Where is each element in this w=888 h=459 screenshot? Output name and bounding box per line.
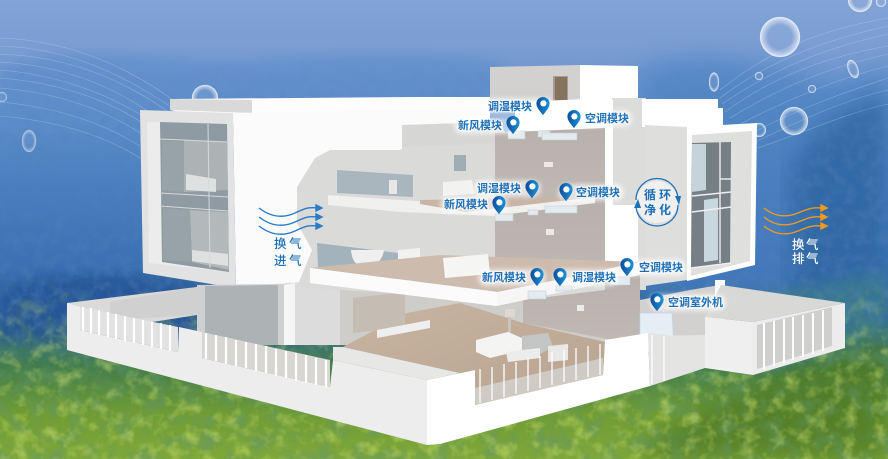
label: 调湿模块 top: 调湿模块 [488, 99, 532, 113]
bubbles [0, 0, 886, 152]
label: 调湿模块 lower [553, 268, 616, 286]
label: 调湿模块 top [488, 97, 550, 115]
arrows: exhaust air [764, 205, 827, 234]
tower and right wing [605, 98, 757, 290]
air flow lines [0, 18, 888, 158]
label: 空调模块 top: 空调模块 [585, 111, 629, 125]
label: 新风模块 middle: 新风模块 [444, 197, 488, 211]
label: 空调室外机: 空调室外机 [668, 295, 723, 309]
floor slabs [310, 180, 640, 306]
text: 换气排气: 换 [792, 237, 805, 252]
interior shaded wall [297, 122, 605, 300]
badge: 循环净化: 净 [644, 202, 656, 217]
label: 新风模块 top [458, 116, 520, 134]
label: 新风模块 top: 新风模块 [458, 118, 502, 132]
text: 换气排气: 气 [806, 251, 819, 266]
ceiling duct modules [495, 131, 630, 299]
label glows [440, 98, 726, 311]
text: 换气排气: 气 [806, 237, 819, 252]
label: 调湿模块 middle: 调湿模块 [477, 181, 521, 195]
label: 调湿模块 middle [477, 180, 539, 198]
left fence base wall [67, 287, 460, 445]
sofa set and lamp [476, 309, 568, 362]
text: 换气排气 [792, 237, 819, 266]
label: 空调模块 middle [559, 183, 620, 201]
building [67, 65, 845, 445]
text: 换气进气: 进 [274, 254, 287, 268]
label: 新风模块 middle [444, 196, 506, 214]
lower level behind fence [197, 270, 640, 405]
text: 换气进气 [274, 236, 302, 268]
arrows: fresh air intake [259, 205, 322, 234]
text: 换气排气: 排 [792, 251, 805, 266]
badge: 循环净化: 环 [659, 188, 671, 202]
text: 换气进气: 气 [289, 236, 302, 251]
label: 空调室外机 [650, 293, 723, 311]
text: 换气进气: 气 [289, 253, 302, 268]
label: 空调模块 top [567, 110, 629, 128]
roof and upper storey [170, 65, 638, 132]
badge: 循环净化: 循 [644, 187, 656, 202]
label: 空调模块 lower: 空调模块 [639, 260, 683, 274]
label: 新风模块 lower [482, 268, 544, 286]
label: 空调模块 middle: 空调模块 [576, 185, 620, 199]
left cantilever box [140, 108, 490, 300]
badge: 循环净化 [634, 179, 681, 226]
outdoor air conditioning unit [640, 280, 725, 386]
label: 新风模块 lower: 新风模块 [482, 270, 526, 284]
badge: 循环净化: 化 [659, 202, 671, 217]
label: 空调模块 lower [620, 258, 683, 276]
text: 换气进气: 换 [274, 236, 287, 251]
right terrace wall [705, 285, 845, 375]
front right base wall [427, 333, 667, 445]
label: 调湿模块 lower: 调湿模块 [572, 270, 616, 284]
